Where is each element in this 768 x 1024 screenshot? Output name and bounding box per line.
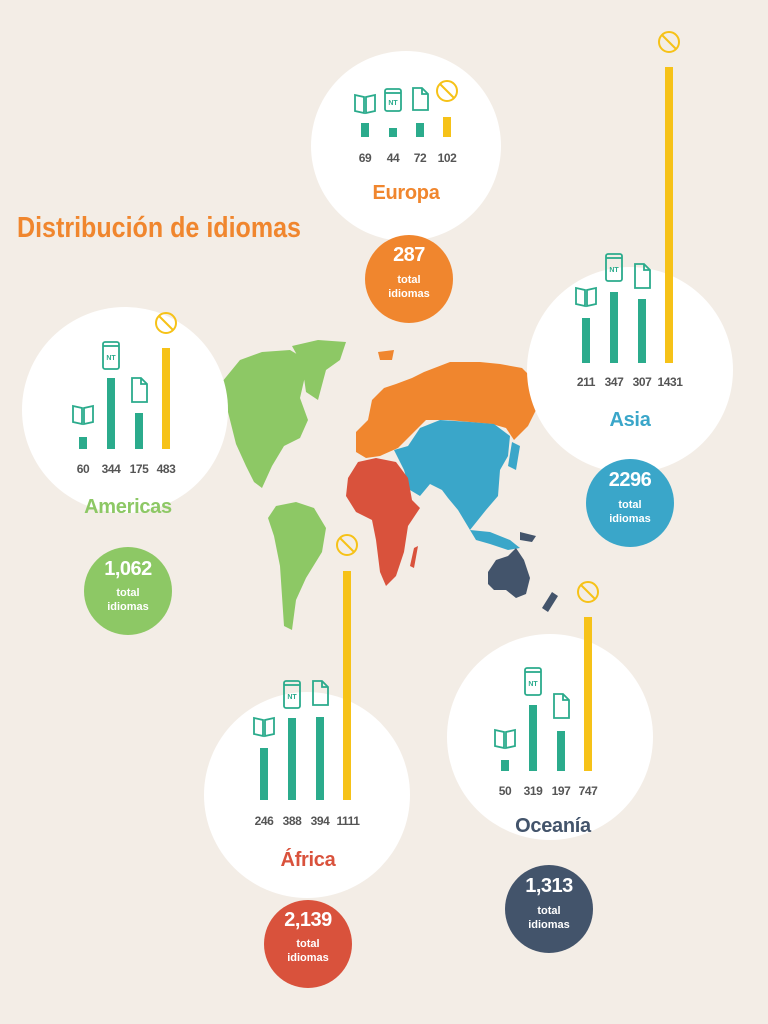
map: south america bbox=[268, 502, 326, 630]
total europa: total bbox=[397, 274, 421, 286]
panel: africa: 1111 bbox=[336, 814, 360, 828]
panel: europa: 102 bbox=[438, 151, 457, 165]
panel: americas: Americas bbox=[84, 496, 172, 518]
total oceania: total bbox=[537, 905, 561, 917]
panel: europa: 69 bbox=[359, 151, 372, 165]
total americas bbox=[84, 547, 172, 635]
total americas: 1,062 bbox=[104, 558, 152, 580]
panel: oceania: 747 bbox=[579, 784, 598, 798]
panel: asia: NT bbox=[609, 267, 619, 274]
total oceania: 1,313 bbox=[525, 875, 573, 897]
panel: oceania: NT bbox=[528, 681, 538, 688]
panel: asia: 1431 bbox=[657, 375, 683, 389]
total americas: idiomas bbox=[107, 601, 149, 613]
panel: americas bbox=[22, 307, 228, 518]
panel: asia bbox=[527, 32, 733, 473]
panel: americas: 344 bbox=[102, 462, 121, 476]
total americas: total bbox=[116, 587, 140, 599]
total africa: 2,139 bbox=[284, 909, 332, 931]
map: europe bbox=[356, 350, 536, 458]
panel: europa: Europa bbox=[372, 182, 441, 204]
panel: oceania: 319 bbox=[524, 784, 543, 798]
panel: europa: 44 bbox=[387, 151, 400, 165]
world map bbox=[222, 340, 558, 630]
total oceania: idiomas bbox=[528, 919, 570, 931]
panel: europa: NT bbox=[388, 100, 398, 107]
panel: americas: 60 bbox=[77, 462, 90, 476]
panel: americas: 175 bbox=[130, 462, 149, 476]
total asia bbox=[586, 459, 674, 547]
map: asia bbox=[394, 420, 520, 550]
total europa bbox=[365, 235, 453, 323]
panel: africa: 394 bbox=[311, 814, 330, 828]
panel: oceania: Oceanía bbox=[515, 815, 592, 837]
panel: africa: África bbox=[281, 848, 337, 871]
total asia: total bbox=[618, 499, 642, 511]
panel: asia: 307 bbox=[633, 375, 652, 389]
panel: americas: NT bbox=[106, 355, 116, 362]
total europa: 287 bbox=[393, 244, 425, 266]
panel: americas: 483 bbox=[157, 462, 176, 476]
panel: africa: NT bbox=[287, 694, 297, 701]
total africa: idiomas bbox=[287, 952, 329, 964]
panel: africa: 388 bbox=[283, 814, 302, 828]
panel: oceania: 50 bbox=[499, 784, 512, 798]
panel: asia: 211 bbox=[577, 375, 596, 389]
total africa: total bbox=[296, 938, 320, 950]
panel: africa bbox=[204, 535, 410, 898]
panel: oceania bbox=[447, 582, 653, 840]
panel: africa: 246 bbox=[255, 814, 274, 828]
map: north america bbox=[222, 340, 346, 488]
total oceania bbox=[505, 865, 593, 953]
panel: asia: Asia bbox=[609, 409, 652, 431]
panel: asia: 347 bbox=[605, 375, 624, 389]
title: Distribución de idiomas bbox=[17, 212, 301, 244]
panel: europa: 72 bbox=[414, 151, 427, 165]
map: africa bbox=[346, 458, 420, 586]
panel: oceania: 197 bbox=[552, 784, 571, 798]
total europa: idiomas bbox=[388, 288, 430, 300]
total africa bbox=[264, 900, 352, 988]
panel: europa bbox=[311, 51, 501, 241]
total asia: idiomas bbox=[609, 513, 651, 525]
total asia: 2296 bbox=[609, 469, 652, 491]
map: oceania bbox=[488, 532, 558, 612]
